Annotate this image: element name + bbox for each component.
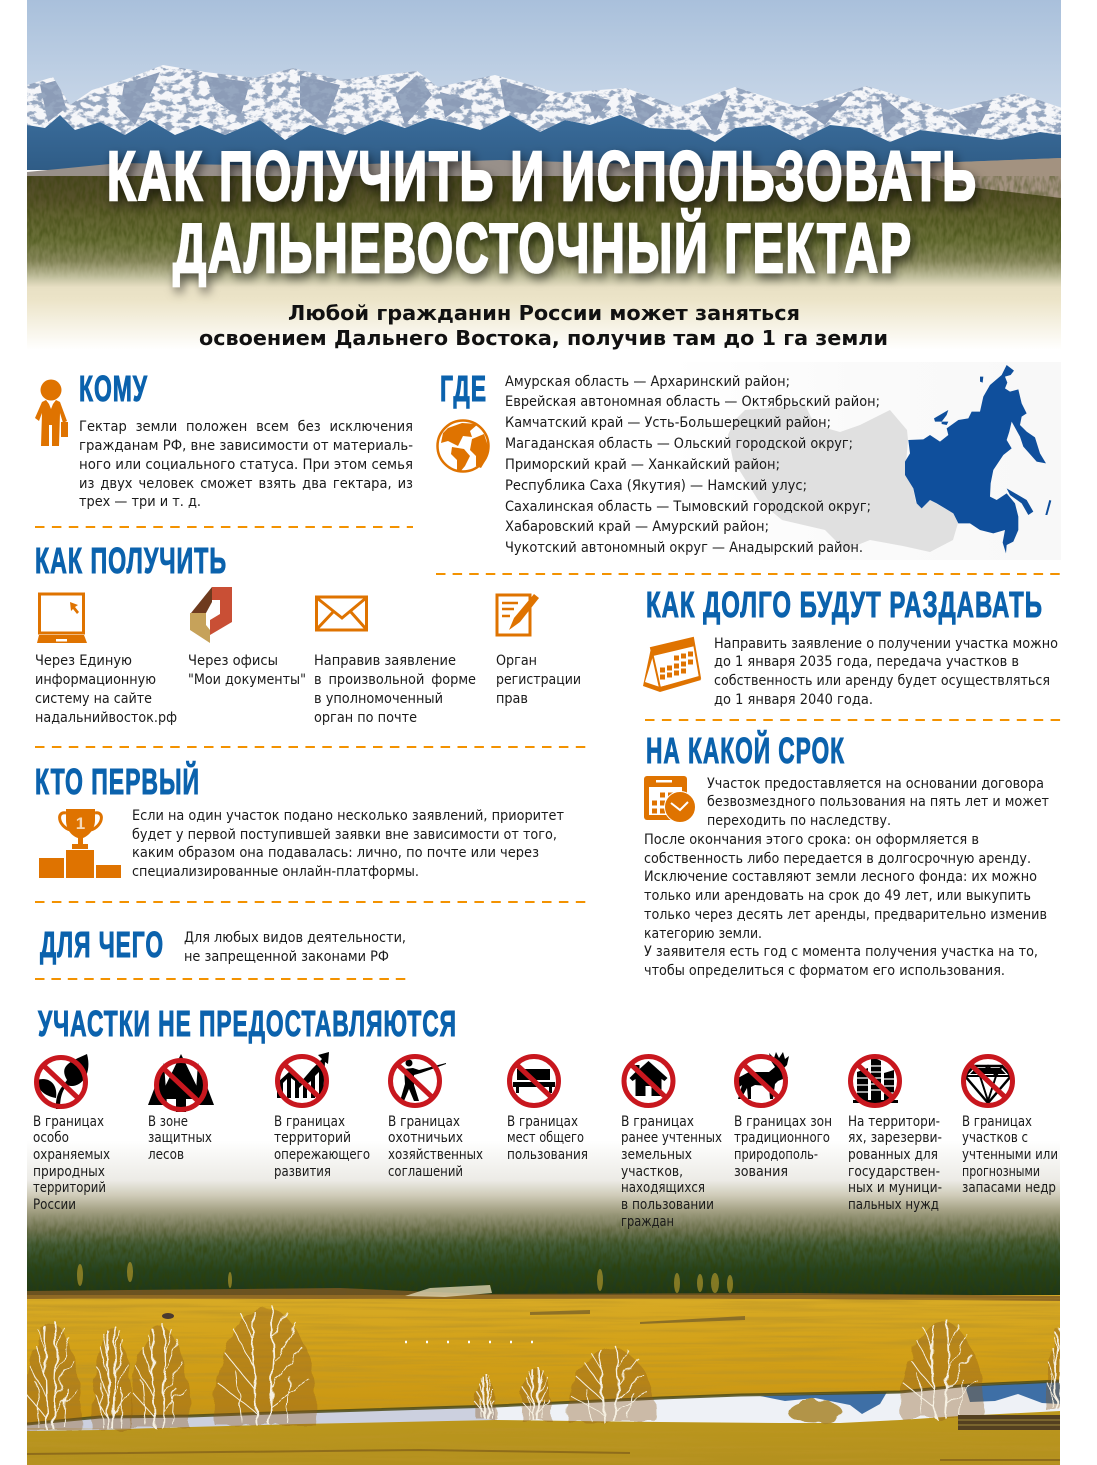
subtitle: освоением Дальнего Востока, получив там до 1 га земли [199, 326, 888, 350]
label: природных [33, 1164, 105, 1180]
icon: chart prohibited [277, 1052, 329, 1106]
label: мест общего [507, 1130, 584, 1146]
text block [79, 419, 413, 510]
list of regions: Чукотский автономный округ — Анадырский район. [505, 540, 863, 556]
text block: безвозмездного пользования на пять лет и может [707, 794, 1049, 810]
text block: гражданам РФ, вне зависимости от материаль- [79, 438, 413, 454]
icon: hunter prohibited [390, 1056, 446, 1106]
text block: ного или социального статуса. При этом семья [79, 457, 413, 473]
text block: После окончания этого срока: он оформляется в [644, 832, 979, 848]
text block: Гектар земли положен всем без исключения [79, 419, 413, 435]
label: в пользовании [621, 1197, 714, 1213]
label [507, 1114, 588, 1163]
icon: diamond prohibited [964, 1056, 1012, 1106]
label: находящихся [621, 1180, 705, 1196]
panel: где [438, 368, 880, 556]
icon: calendar with clock [644, 776, 696, 822]
text block: собственность или аренду будет осуществляться [714, 673, 1050, 689]
label: рованных для [848, 1147, 938, 1163]
step text: орган регистрации [496, 653, 581, 707]
label [621, 1114, 722, 1230]
label: пользования [507, 1147, 588, 1163]
label: участков с [962, 1130, 1028, 1146]
text block [184, 930, 406, 965]
text block: Если на один участок подано несколько заявлений, приоритет [132, 808, 564, 824]
list of regions: Еврейская автономная область — Октябрьский район; [505, 394, 880, 410]
text block: каким образом она подавалась: лично, по почте или через [132, 845, 539, 861]
label: В границах [962, 1114, 1032, 1130]
step text: Мои документы: "Мои документы" [188, 672, 306, 688]
label: В зоне [148, 1114, 188, 1130]
panel: для чего [40, 924, 406, 965]
text block [132, 808, 564, 880]
heading: УЧАСТКИ НЕ ПРЕДОСТАВЛЯЮТСЯ [38, 1003, 457, 1044]
subtitle: Любой гражданин России может заняться [288, 301, 800, 325]
text block: Участок предоставляется на основании договора [707, 776, 1044, 792]
step text: Единая система: систему на сайте [35, 691, 152, 707]
step text: почта: орган по почте [314, 710, 417, 726]
heading: ГДЕ [440, 368, 487, 409]
item: государственные нужды [848, 1056, 942, 1213]
icon: Мои документы logo [190, 587, 232, 643]
text block: Для любых видов деятельности, [184, 930, 406, 946]
text block [714, 636, 1058, 708]
map of Russia with Far East highlighted [670, 362, 1061, 560]
icon: globe [438, 420, 488, 472]
list of regions: Амурская область — Архаринский район; [505, 374, 790, 390]
heading: ДЛЯ ЧЕГО [40, 924, 164, 965]
text block: У заявителя есть год с момента получения участка на то, [644, 944, 1038, 960]
text block: только или арендовать на срок до 49 лет, или выкупить [644, 888, 1031, 904]
label [148, 1114, 212, 1163]
panel: как долго будут раздавать [643, 584, 1058, 708]
label: В границах [621, 1114, 694, 1130]
label: запасами недр [962, 1180, 1056, 1196]
step text: Единая система: информационную [35, 672, 156, 688]
label: государствен- [848, 1164, 940, 1180]
list of regions: Сахалинская область — Тымовский городской округ; [505, 499, 871, 515]
step text: Мои документы: Через офисы [188, 653, 278, 669]
icon: laptop [37, 594, 87, 643]
text block: до 1 января 2035 года, передача участков в [714, 654, 1019, 670]
list of regions: Республика Саха (Якутия) — Намский улус; [505, 478, 807, 494]
text block: Направить заявление о получении участка можно [714, 636, 1058, 652]
item: ранее учтенные участки [621, 1056, 722, 1230]
label: пальных нужд [848, 1197, 939, 1213]
item: природные территории [33, 1054, 110, 1213]
text block: до 1 января 2040 года. [714, 692, 873, 708]
label: участков, [621, 1164, 683, 1180]
heading: КТО ПЕРВЫЙ [35, 760, 200, 802]
step text: Единая система: Через Единую [35, 653, 132, 669]
label: граждан [621, 1214, 674, 1230]
icon: envelope [316, 597, 366, 630]
label [848, 1114, 942, 1213]
step text: почта: Направив заявление [314, 653, 456, 669]
text block: специализированные онлайн-платформы. [132, 864, 419, 880]
label [388, 1114, 483, 1180]
text block: собственность либо передается в долгосрочную аренду. [644, 851, 1031, 867]
list of regions: Приморский край — Ханкайский район; [505, 457, 780, 473]
item: охотничьи хозяйства [388, 1056, 483, 1180]
label: На территори- [848, 1114, 940, 1130]
step text: орган регистрации: Орган [496, 653, 537, 669]
icon: person [35, 380, 68, 446]
icon: buildings prohibited [850, 1056, 900, 1106]
label: В границах зон [734, 1114, 832, 1130]
label: ных и муници- [848, 1180, 942, 1196]
panel: участки не предоставляются [33, 1003, 1058, 1230]
label: ранее учтенных [621, 1130, 722, 1146]
item: защитные леса [148, 1054, 214, 1163]
list of regions: Камчатский край — Усть-Большерецкий район; [505, 415, 831, 431]
subtitle [199, 301, 888, 350]
label: зования [734, 1164, 788, 1180]
label: территорий [274, 1130, 351, 1146]
icon: trophy on podium [39, 809, 121, 878]
icon: calendar [643, 638, 701, 692]
label: В границах [507, 1114, 578, 1130]
step text: Единая система: надальнийвосток.рф [35, 710, 177, 726]
text block: Исключение составляют земли лесного фонда: их можно [644, 869, 1037, 885]
text block [644, 776, 1049, 979]
panel: на какой срок [644, 729, 1049, 979]
label: В границах [274, 1114, 345, 1130]
label: охраняемых [33, 1147, 110, 1163]
item: опережающее развитие [274, 1052, 370, 1180]
text block: категорию земли. [644, 926, 762, 942]
icon: trophy on podium: 1 [76, 814, 85, 833]
panel: как получить [35, 540, 581, 726]
label: традиционного [734, 1130, 830, 1146]
label: лесов [148, 1147, 184, 1163]
label [734, 1114, 832, 1180]
step text: Единая система [35, 653, 177, 726]
panel: кто первый [35, 760, 564, 880]
bottom landscape photo [27, 1153, 1060, 1465]
label: В границах [33, 1114, 104, 1130]
label [274, 1114, 370, 1180]
icon: leaf prohibited [36, 1054, 88, 1109]
step text: орган регистрации: регистрации [496, 672, 581, 688]
heading: НА КАКОЙ СРОК [646, 729, 845, 771]
item: запасы недр [962, 1056, 1058, 1196]
icon: trees prohibited [148, 1054, 214, 1112]
label: земельных [621, 1147, 692, 1163]
icon: house prohibited [624, 1056, 673, 1106]
text block: переходить по наследству. [707, 813, 891, 829]
top landscape photo [27, 0, 1068, 350]
heading: КОМУ [79, 368, 148, 409]
label: хозяйственных [388, 1147, 483, 1163]
step text: почта [314, 653, 476, 726]
step text: почта: в уполномоченный [314, 691, 443, 707]
text block: чтобы определиться с форматом его использования. [644, 963, 1005, 979]
item: места общего пользования [507, 1056, 588, 1163]
label: В границах [388, 1114, 460, 1130]
label: особо [33, 1130, 69, 1146]
label: развития [274, 1164, 331, 1180]
icon: moose prohibited [736, 1052, 789, 1106]
heading: КАК ПОЛУЧИТЬ [35, 540, 227, 581]
step text: Мои документы [188, 653, 306, 688]
title [107, 137, 978, 287]
text block: будет у первой поступившей заявки вне зависимости от того, [132, 827, 557, 843]
label: прогнозными [962, 1164, 1040, 1180]
step text: почта: в произвольной форме [314, 672, 476, 688]
list of regions: Магаданская область — Ольский городской округ; [505, 436, 853, 452]
step text: орган регистрации: прав [496, 691, 528, 707]
icon: bench prohibited [510, 1056, 558, 1106]
label: опережающего [274, 1147, 370, 1163]
label: ях, зарезерви- [848, 1130, 942, 1146]
panel: кому [35, 368, 413, 510]
text block: из двух человек сможет взять два гектара, из [79, 476, 413, 492]
text block: не запрещенной законами РФ [184, 949, 389, 965]
label: защитных [148, 1130, 212, 1146]
label [33, 1114, 110, 1213]
label: охотничьих [388, 1130, 463, 1146]
label: территорий [33, 1180, 106, 1196]
label: России [33, 1197, 76, 1213]
label: учтенными или [962, 1147, 1058, 1163]
label [962, 1114, 1058, 1196]
text block: только через десять лет аренды, предварительно изменив [644, 907, 1047, 923]
label: природополь- [734, 1147, 818, 1163]
icon: document with pen [497, 594, 539, 635]
list of regions [505, 374, 880, 556]
label: соглашений [388, 1164, 463, 1180]
list of regions: Хабаровский край — Амурский район; [505, 519, 769, 535]
text block: трех — три и т. д. [79, 494, 201, 510]
item: традиционное природопользование [734, 1052, 832, 1180]
